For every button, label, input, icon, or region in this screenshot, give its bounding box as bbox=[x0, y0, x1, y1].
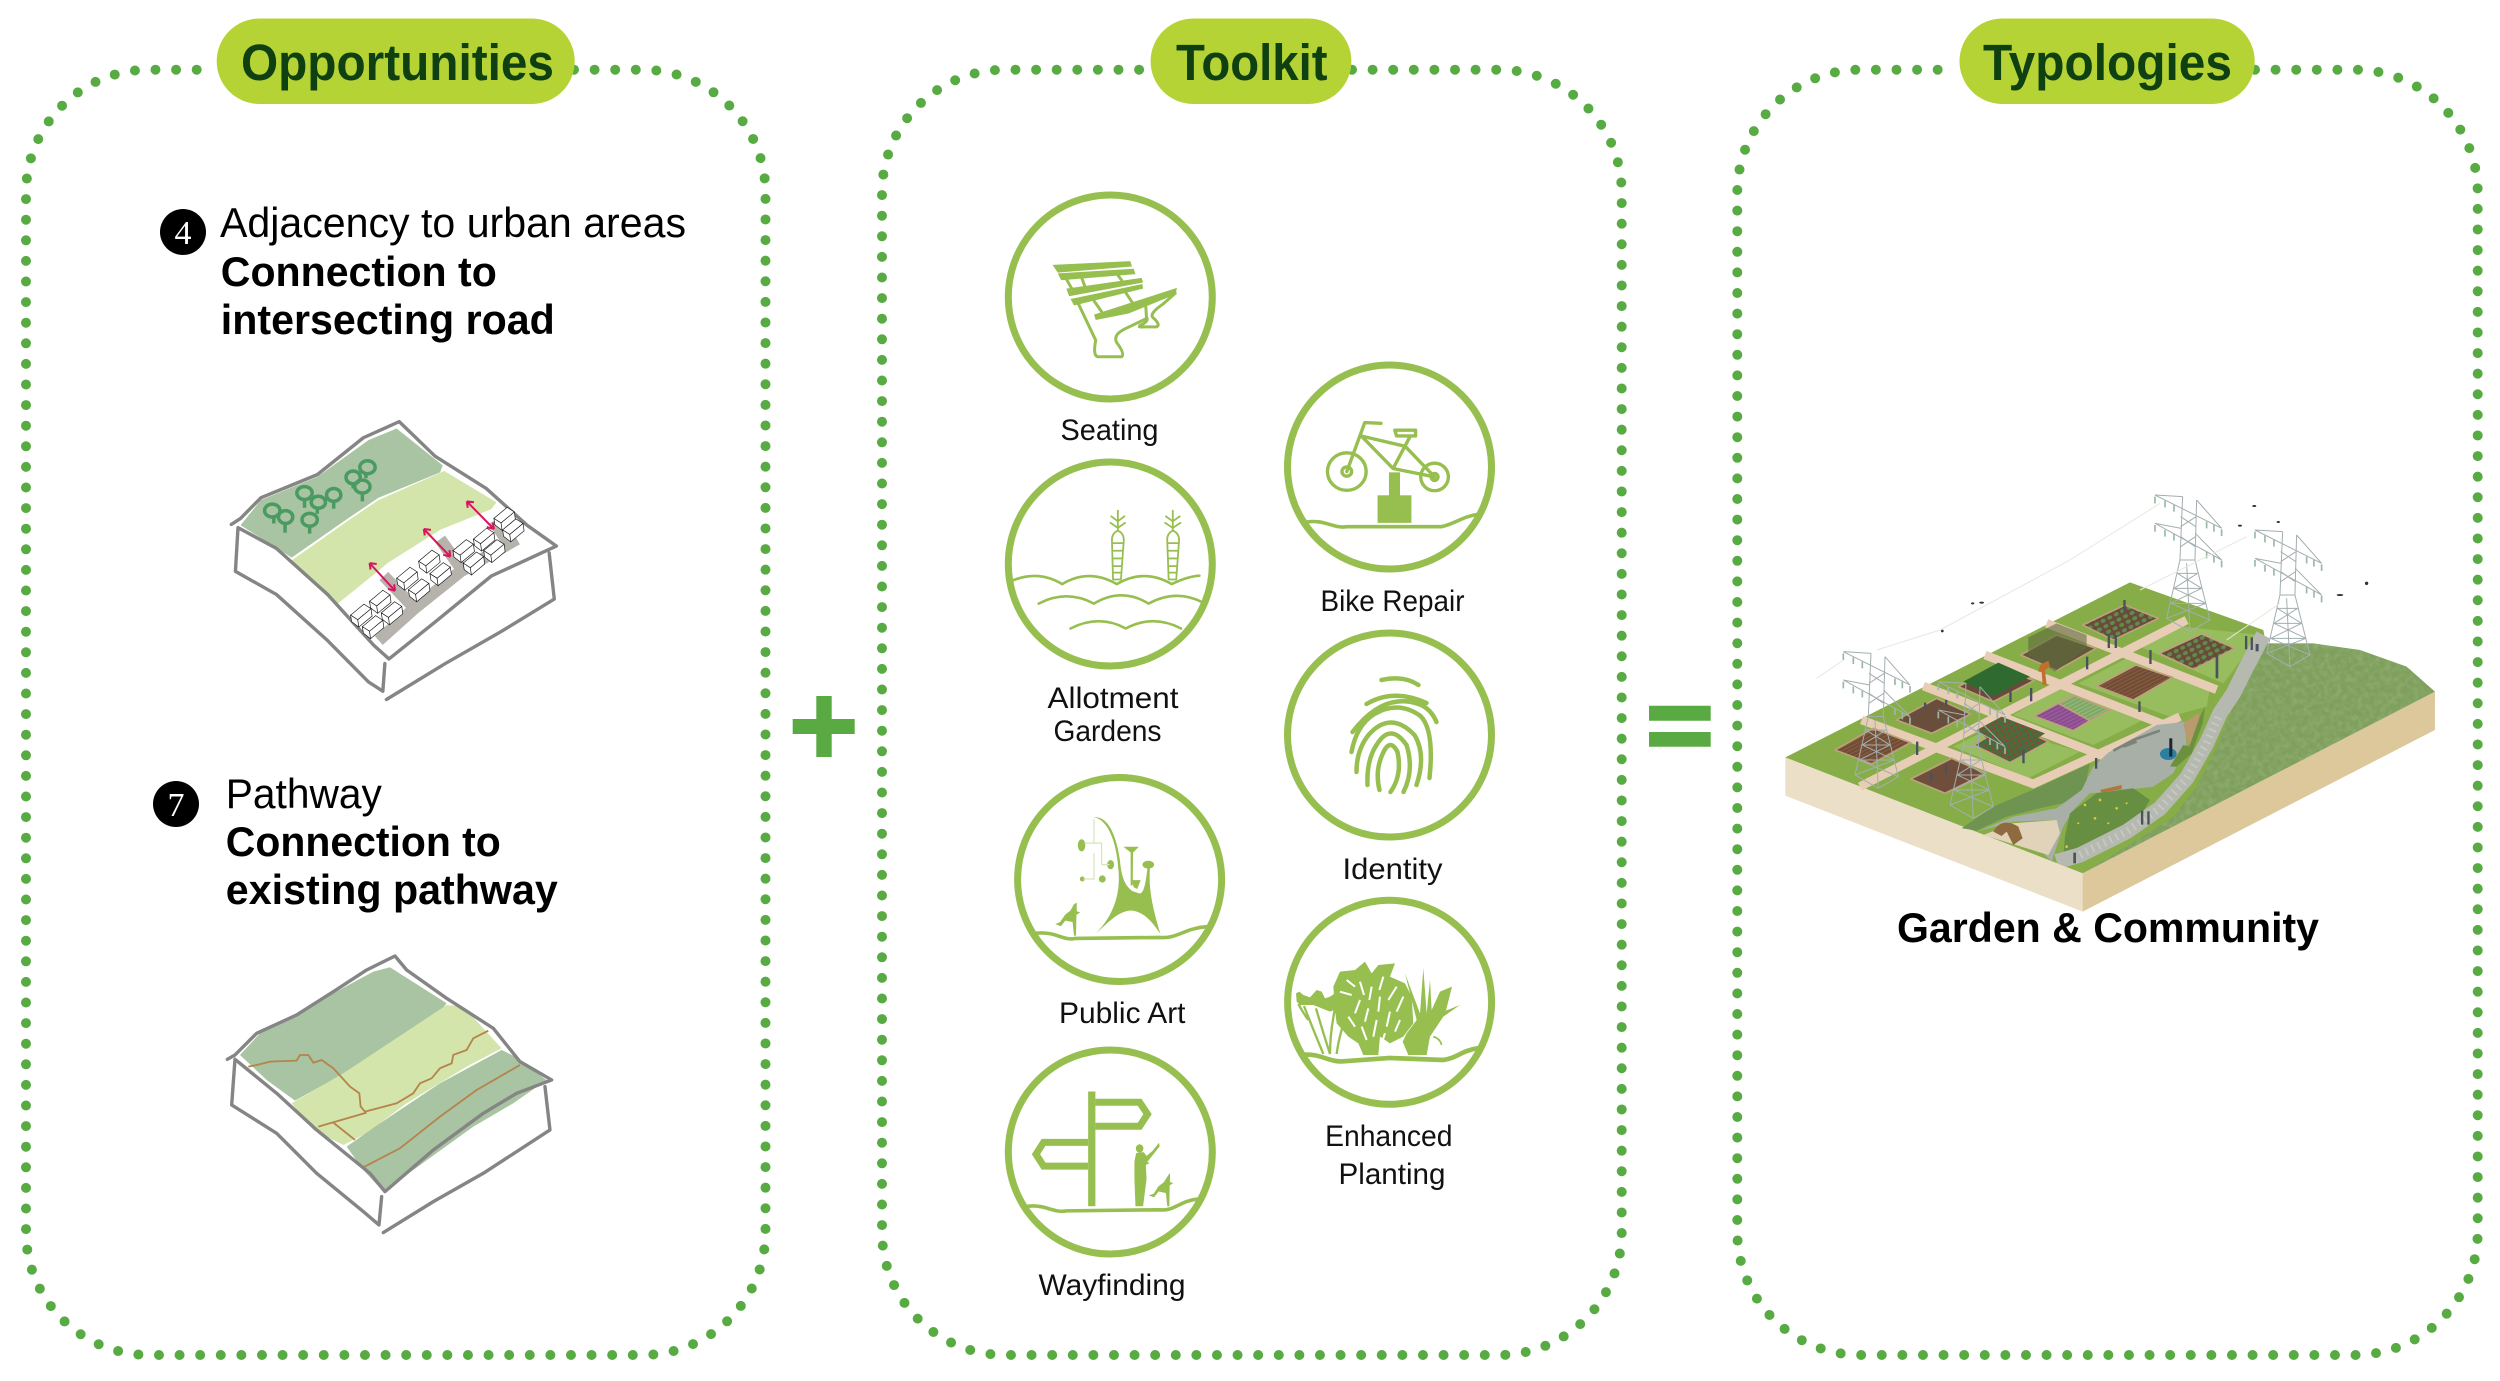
diagram: pathway connection sketch bbox=[227, 956, 552, 1233]
bike racks bbox=[2113, 731, 2160, 751]
icon: equals sign bbox=[1649, 706, 1711, 747]
lighter lawn patches bbox=[1953, 627, 2260, 778]
label: public art: Public Art bbox=[1059, 997, 1186, 1030]
label: identity: Identity bbox=[1342, 853, 1442, 886]
heading pill: Opportunities: Opportunities bbox=[241, 34, 554, 91]
icon: wayfinding bbox=[1008, 1050, 1212, 1254]
text block: pathway: existing pathway bbox=[226, 866, 558, 913]
text block: pathway: Connection to bbox=[226, 818, 501, 865]
heading pill: Typologies bbox=[1960, 18, 2255, 104]
number badge 4: 4 bbox=[174, 215, 192, 252]
lawn surface bbox=[1785, 582, 2267, 873]
planted sliver bbox=[2170, 707, 2205, 767]
repair station bbox=[2160, 738, 2177, 760]
orange sculpture bbox=[2038, 661, 2050, 685]
hillside meadow bbox=[2083, 643, 2435, 873]
heading pill: Typologies: Typologies bbox=[1983, 34, 2232, 91]
bench log bbox=[2100, 785, 2122, 793]
transmission towers bbox=[1843, 495, 2322, 818]
text block: pathway bbox=[226, 770, 558, 913]
power lines bbox=[1817, 503, 2280, 678]
sign wall bbox=[2183, 713, 2199, 745]
number badge 4 bbox=[160, 209, 206, 255]
label: enhanced planting bbox=[1325, 1120, 1452, 1191]
text block: adjacency to urban areas: intersecting road bbox=[221, 296, 555, 343]
text block: adjacency to urban areas: Adjacency to urban areas bbox=[220, 199, 686, 246]
meadow strip bbox=[1962, 763, 2090, 831]
label: bike repair: Bike Repair bbox=[1320, 585, 1464, 618]
gravel plaza bbox=[1977, 722, 2187, 862]
label: wayfinding: Wayfinding bbox=[1038, 1269, 1186, 1302]
panel: opportunities frame bbox=[26, 18, 766, 1355]
label: allotment gardens bbox=[1048, 682, 1179, 748]
text block: adjacency to urban areas bbox=[220, 199, 686, 343]
text block: adjacency to urban areas: Connection to bbox=[221, 248, 497, 295]
label: enhanced planting: Enhanced bbox=[1325, 1120, 1452, 1153]
icon: allotment gardens bbox=[1008, 462, 1212, 666]
icon: bike repair bbox=[1288, 365, 1492, 569]
people bbox=[1916, 600, 2259, 863]
label: seating: Seating bbox=[1060, 414, 1158, 447]
garden beds bbox=[1835, 605, 2235, 793]
icon: enhanced planting bbox=[1288, 900, 1492, 1104]
heading pill: Toolkit bbox=[1151, 18, 1351, 104]
panel: typologies frame bbox=[1737, 18, 2478, 1355]
diagram: road connection sketch bbox=[231, 422, 556, 699]
icon: public art bbox=[1018, 778, 1222, 982]
label: allotment gardens: Allotment bbox=[1048, 682, 1179, 715]
block side faces bbox=[1785, 692, 2435, 912]
caption: garden and community: Garden & Community bbox=[1897, 904, 2320, 951]
boulder arch bbox=[1993, 823, 2023, 845]
garden paths bbox=[1860, 620, 2217, 787]
planted island bbox=[2063, 788, 2150, 857]
label: enhanced planting: Planting bbox=[1338, 1158, 1446, 1191]
icon: seating bbox=[1008, 195, 1212, 399]
text block: pathway: Pathway bbox=[226, 770, 382, 817]
panel: toolkit frame bbox=[882, 18, 1622, 1355]
birds bbox=[1941, 505, 2368, 632]
label: allotment gardens: Gardens bbox=[1054, 715, 1162, 748]
trellis and raised planting bbox=[1963, 623, 2087, 757]
number badge 7 bbox=[153, 781, 199, 827]
yellow flowers on island bbox=[2065, 799, 2128, 848]
icon: identity fingerprint bbox=[1288, 633, 1492, 837]
winding gravel path bbox=[2057, 635, 2263, 862]
number badge 7: 7 bbox=[168, 787, 184, 824]
icon: plus sign bbox=[793, 696, 855, 757]
illustration: garden and community isometric block bbox=[1785, 495, 2435, 912]
sand play area bbox=[1983, 820, 2060, 855]
heading pill: Toolkit: Toolkit bbox=[1176, 34, 1328, 91]
heading pill: Opportunities bbox=[217, 18, 575, 104]
